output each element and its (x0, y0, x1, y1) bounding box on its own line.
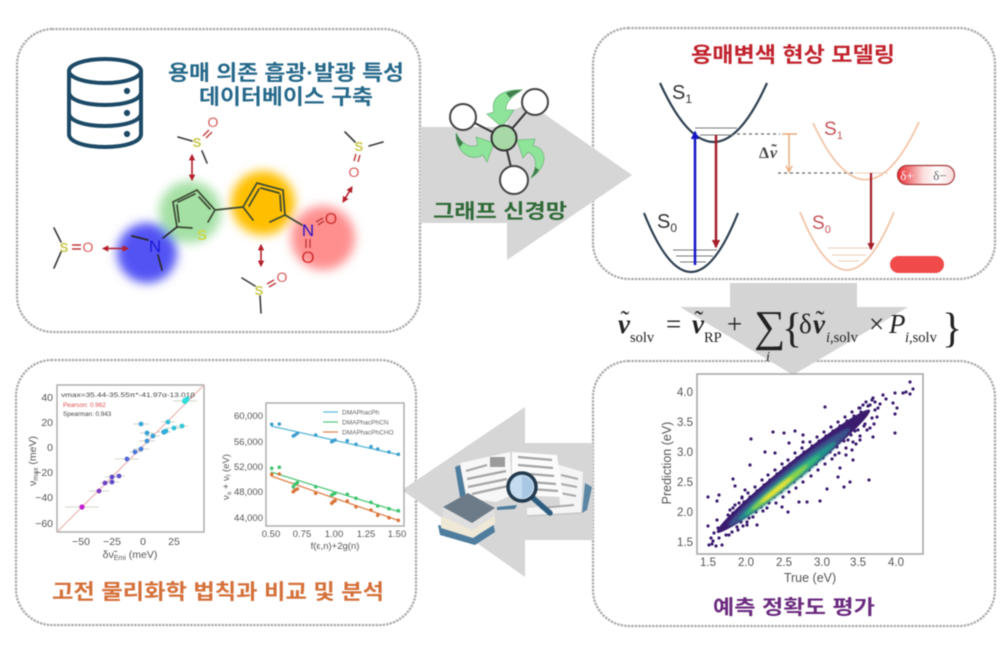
legend (323, 410, 394, 436)
solvent: top: O (208, 114, 219, 130)
formula: δ (799, 309, 812, 339)
diagram: energy curves in solvent (800, 119, 919, 270)
S0 label: 0 (825, 224, 831, 236)
title: database: 데이터베이스 구축 (199, 86, 373, 109)
shift bracket (782, 134, 797, 172)
y ticks (677, 387, 693, 549)
x ticks (700, 557, 904, 569)
icon: graph neural network (450, 89, 548, 194)
formula: i,solv (905, 330, 938, 346)
solvent: bottom (242, 269, 288, 313)
y ticks: −20 (35, 467, 53, 479)
formula: + (727, 309, 742, 339)
solvent: right (345, 132, 383, 180)
icon: database (69, 59, 141, 147)
y label: ν (27, 481, 39, 486)
y ticks: 48,000 (234, 487, 263, 498)
polarized solute pill: δ− (933, 168, 947, 183)
regression lines (271, 426, 400, 455)
y label: Prediction (eV) (660, 422, 674, 504)
y ticks: −40 (35, 492, 53, 504)
y ticks: 2.0 (677, 507, 693, 519)
label: graph neural network: 그래프 신경망 (433, 200, 567, 223)
solvent: left (54, 228, 94, 268)
x ticks: 0 (140, 536, 146, 548)
panel: accuracy evaluation (593, 361, 995, 626)
x ticks: 1.5 (700, 557, 716, 569)
blue absorption arrow (694, 132, 696, 265)
y ticks: 4.0 (677, 387, 693, 399)
series: green (272, 467, 398, 511)
solvent: bottom: O (277, 269, 288, 285)
y ticks: 40 (41, 392, 53, 404)
S0 label: S (812, 213, 825, 234)
title: database (168, 62, 404, 109)
x ticks: 1.50 (388, 529, 406, 540)
formula: ˜ (621, 306, 630, 335)
x ticks: −25 (103, 536, 121, 548)
annotation (61, 392, 195, 418)
x ticks: −50 (72, 536, 90, 548)
formula: ν (618, 309, 631, 339)
S1 label: 1 (685, 92, 692, 106)
y ticks: −60 (35, 518, 53, 530)
formula: RP (704, 330, 722, 346)
data points (79, 396, 190, 510)
atoms: O (301, 248, 315, 267)
x label: (meV) (126, 549, 157, 561)
solvent: top: S (193, 135, 202, 150)
diagram: molecule with solvents (54, 114, 383, 313)
polarized solute pill: δ+ (900, 168, 914, 183)
highlight blobs (117, 171, 355, 283)
series: orange (272, 474, 398, 520)
x ticks: 1.00 (325, 529, 343, 540)
x label: δν̃ (103, 549, 114, 561)
y label: (meV) (27, 436, 39, 468)
icon: open books with magnifier (438, 452, 592, 545)
x label: Emi (114, 555, 126, 562)
title: classical comparison: 고전 물리화학 법칙과 비교 및 분석 (52, 581, 384, 604)
label: delta nu (759, 142, 778, 162)
molecule skeleton (132, 183, 302, 270)
chart: Lippert plot (221, 403, 406, 552)
interaction arrows (103, 155, 352, 266)
atoms: S (197, 227, 207, 244)
solvent: left: O (83, 239, 94, 255)
formula (618, 302, 962, 365)
S1 label: S (824, 119, 837, 140)
legend: DMAPhacPhCHO (342, 430, 394, 436)
solvent: bottom: S (255, 283, 264, 298)
x ticks: 2.5 (776, 557, 792, 569)
y ticks: 44,000 (234, 513, 263, 524)
label: delta nu: Δ (759, 145, 769, 162)
S0 label: S (657, 211, 670, 233)
x ticks (72, 536, 180, 548)
arrow: left to comparison (402, 407, 593, 577)
y ticks (234, 411, 263, 524)
solvent: left: S (60, 240, 69, 255)
atoms: N (149, 237, 161, 256)
title: accuracy evaluation: 예측 정확도 평가 (713, 596, 875, 619)
y label: f (227, 474, 233, 476)
x ticks: 0.75 (293, 529, 311, 540)
atoms (149, 211, 337, 267)
solvent: top (178, 114, 219, 163)
panel: solvatochromism modeling (593, 28, 995, 279)
atoms: N (302, 221, 314, 240)
legend: DMAPhacPh (342, 410, 380, 416)
panel: database (17, 29, 420, 332)
chart: delta nu correlation (27, 385, 204, 562)
red solute pill (890, 256, 944, 273)
formula: i (766, 350, 770, 365)
y ticks: 3.5 (677, 417, 693, 429)
formula: ˜ (816, 306, 825, 335)
red emission arrow (715, 135, 717, 247)
x ticks: 0.50 (262, 529, 280, 540)
green arrows (456, 90, 544, 178)
formula: ν (692, 309, 705, 339)
annotation: Pearson: 0.962 (63, 402, 106, 409)
point cloud (708, 382, 913, 546)
x ticks: 1.25 (357, 529, 375, 540)
atoms: O (325, 211, 337, 228)
x label: f(ε,n)+2g(n) (311, 541, 359, 552)
scatter chart: prediction vs true (660, 374, 923, 585)
formula: } (942, 306, 962, 352)
y ticks: 56,000 (234, 437, 263, 448)
y label: + ν (221, 476, 232, 492)
S1 label: 1 (837, 130, 843, 142)
solvent: right: O (349, 164, 360, 180)
y label: ν (221, 495, 232, 500)
label: delta nu: ˜ (771, 142, 777, 159)
x label: True (eV) (784, 571, 836, 585)
formula: P (888, 309, 906, 339)
arrow: right to modeling (420, 104, 632, 260)
x ticks: 3.0 (814, 557, 830, 569)
y label: max (33, 467, 40, 481)
formula: ∑ (754, 302, 785, 351)
stack of books (438, 493, 495, 545)
magnifier (508, 473, 550, 513)
y label: a (227, 491, 233, 495)
S0 label: 0 (670, 221, 677, 235)
solvent: right: S (355, 139, 364, 154)
legend: DMAPhacPhCN (342, 420, 389, 426)
S1 label: S (672, 82, 685, 104)
title: modeling: 용매변색 현상 모델링 (691, 44, 895, 67)
x ticks: 3.5 (850, 557, 866, 569)
polarized solute pill (898, 166, 954, 184)
x ticks: 4.0 (888, 557, 904, 569)
y ticks: 1.5 (677, 537, 693, 549)
y label: (eV) (221, 454, 232, 475)
x ticks (262, 529, 406, 540)
y ticks: 60,000 (234, 411, 263, 422)
title: database: 용매 의존 흡광·발광 특성 (168, 62, 404, 85)
series: blue (272, 424, 398, 454)
formula: i,solv (826, 330, 859, 346)
error bars (65, 401, 197, 507)
y ticks: 0 (47, 442, 53, 454)
formula: × (869, 309, 884, 339)
annotation: νmax=35.44-35.55π*-41.97α-13.01β (61, 392, 195, 399)
annotation: Spearman: 0.943 (63, 411, 112, 418)
open book (455, 452, 563, 510)
y ticks: 52,000 (234, 462, 263, 473)
formula: { (782, 306, 802, 352)
formula: ν (813, 309, 826, 339)
label: delta nu: ν (770, 145, 778, 162)
y ticks: 20 (41, 417, 53, 429)
formula: solv (630, 330, 655, 346)
diagram: energy curves in gas phase (644, 82, 767, 272)
panel: classical comparison (16, 360, 416, 625)
x ticks: 25 (168, 536, 180, 548)
formula: ˜ (695, 306, 704, 335)
y ticks: 3.0 (677, 447, 693, 459)
back book (527, 464, 592, 516)
arrow: down to evaluation (680, 283, 908, 375)
dashed levels (737, 134, 853, 173)
y ticks: 2.5 (677, 477, 693, 489)
formula: = (666, 309, 681, 339)
y ticks (35, 392, 53, 530)
x ticks: 2.0 (738, 557, 754, 569)
